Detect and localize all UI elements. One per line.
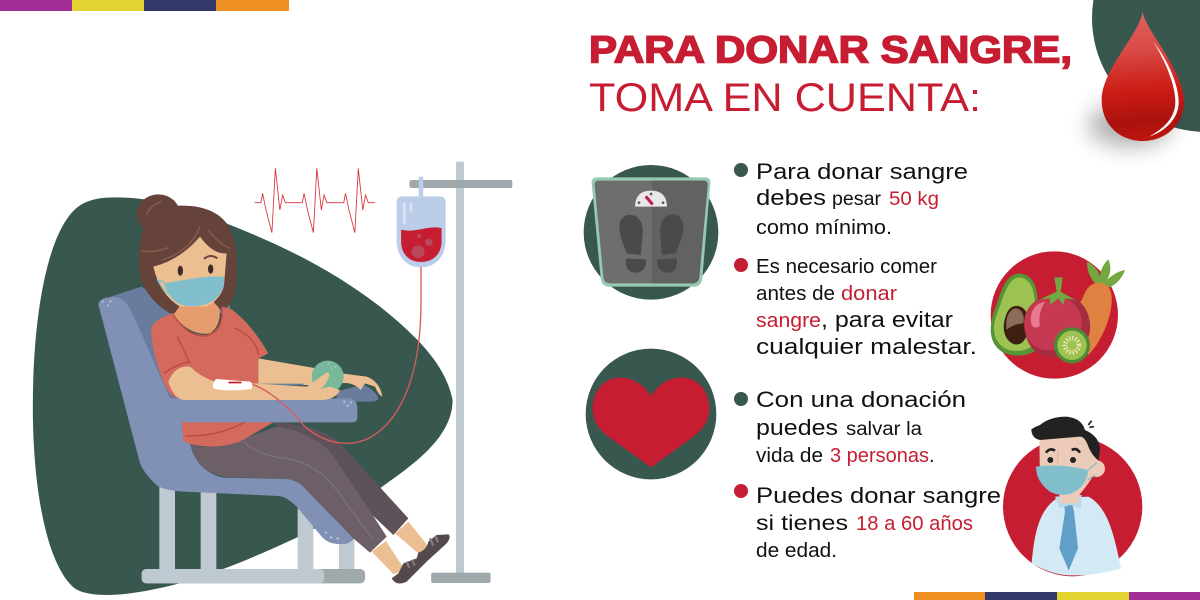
bullet 4: age: [734, 483, 1001, 562]
hair back and bun: [137, 194, 237, 313]
bullet 4: age: de edad.: [756, 540, 837, 562]
shirt: [1032, 495, 1121, 575]
bullet 3: saves lives: .: [929, 445, 935, 467]
title: TOMA EN CUENTA:: [589, 76, 981, 120]
front arm and hand: [168, 367, 340, 400]
arm bandage: [213, 379, 252, 390]
face mask: [158, 277, 224, 306]
bullet 4: age: Puedes donar sangre: [756, 483, 1001, 508]
bullet 3: saves lives: 3 personas: [830, 445, 929, 467]
IV pole: [409, 162, 512, 583]
armrest: [168, 398, 357, 422]
bullet 2: eat before donating: [734, 256, 977, 359]
back arm and hand: [258, 358, 382, 397]
background blob: [33, 197, 453, 595]
title: [589, 30, 1072, 120]
head: [1031, 417, 1105, 503]
shirt: [151, 307, 273, 447]
bullet 3: saves lives: vida de: [756, 445, 823, 467]
title: PARA DONAR SANGRE,: [589, 30, 1072, 72]
blood drop icon: [1088, 0, 1200, 147]
face: [142, 202, 230, 307]
bullet 2: eat before donating: antes de: [756, 283, 835, 305]
top colour bar: [0, 0, 289, 11]
bullet 3: saves lives: salvar la: [846, 419, 922, 440]
bullet 1: weight: [734, 159, 968, 239]
bullet 1: weight: Para donar sangre: [756, 159, 968, 184]
icon: heart: [586, 349, 716, 479]
icon: man with mask: [1003, 417, 1142, 576]
bullet 3: saves lives: puedes: [756, 415, 838, 440]
bullet 4: age: si tienes: [756, 512, 848, 535]
chair body: [98, 297, 353, 544]
bullet 1: weight: como mínimo.: [756, 217, 892, 239]
chair legs and base: [142, 482, 365, 583]
bullet 1: weight: pesar: [832, 189, 882, 210]
bullet 3: saves lives: [734, 387, 966, 467]
chair tip shade: [340, 528, 355, 544]
icon: bathroom scale: [584, 165, 718, 300]
cucumber: [1054, 327, 1090, 363]
heartbeat line: [255, 168, 375, 233]
chair dots: [102, 301, 352, 539]
chair back shade: [110, 287, 230, 400]
neck: [173, 302, 220, 334]
bullet 2: eat before donating: donar: [841, 283, 897, 305]
avocado: [991, 273, 1043, 356]
illustration: IV stand and bag: [255, 162, 512, 583]
bullet 2: eat before donating: sangre: [756, 310, 821, 332]
pants: [190, 422, 408, 553]
bullet 2: eat before donating: cualquier malestar.: [756, 334, 977, 359]
icon: fruit and vegetables: [991, 251, 1125, 379]
bullet 1: weight: debes: [756, 185, 826, 210]
carrot: [1067, 259, 1125, 355]
bullet 2: eat before donating: Es necesario comer: [756, 256, 937, 278]
bullet 3: saves lives: Con una donación: [756, 387, 966, 412]
bullet 4: age: 18 a 60 años: [856, 513, 973, 535]
chair rear armrest: [337, 384, 378, 402]
bullet 2: eat before donating: , para evitar: [821, 307, 953, 332]
transfusion tube: [253, 267, 421, 443]
bottom colour bar: [914, 592, 1200, 600]
blood bag: [397, 177, 446, 267]
bullet 1: weight: 50 kg: [889, 189, 939, 210]
tomato: [1024, 277, 1090, 357]
illustration: woman in donation chair: [98, 194, 450, 584]
stress ball: [312, 361, 344, 393]
legs and shoes: [372, 522, 450, 584]
